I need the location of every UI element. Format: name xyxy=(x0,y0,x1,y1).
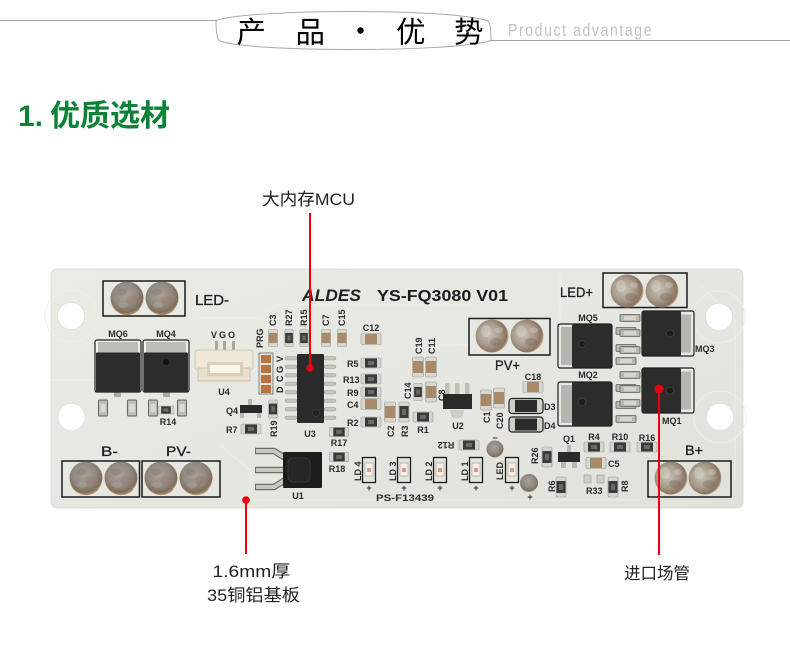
connector U4 xyxy=(195,330,253,397)
MOSFET MQ4: MQ4 xyxy=(156,329,176,339)
solder terminals xyxy=(62,273,731,497)
passive components: C14 xyxy=(403,382,413,399)
passive components: R3 xyxy=(400,425,410,437)
substrate label xyxy=(207,562,300,605)
terminal labels: PV+ xyxy=(495,357,520,373)
passive components: C11 xyxy=(427,338,437,354)
passive components: R12 xyxy=(438,440,454,450)
diodes D3 D4: D3 xyxy=(544,402,556,412)
terminal labels: B- xyxy=(101,443,118,459)
passive components: C8 xyxy=(437,389,447,401)
callout: substrate xyxy=(207,496,300,605)
header title: 品 xyxy=(296,16,325,50)
PRG pads: C xyxy=(275,375,285,382)
passive components: C20 xyxy=(495,412,505,429)
substrate label: 1.6mm厚 xyxy=(212,562,290,581)
MOSFET MQ5 xyxy=(558,313,636,368)
LED indicators: LD 2 xyxy=(424,461,434,481)
MCU label: 大内存MCU xyxy=(262,190,355,209)
regulator U2: U2 xyxy=(452,421,464,431)
passive components: R16 xyxy=(639,433,655,443)
PRG pads: D xyxy=(275,386,285,393)
sensor U1: U1 xyxy=(292,491,304,501)
passive components: R33 xyxy=(586,486,603,496)
passive components: R18 xyxy=(329,464,345,474)
MOSFET MQ3 xyxy=(620,311,715,356)
IC U3 with pins xyxy=(285,354,336,439)
terminal B+ xyxy=(648,461,731,497)
terminal labels: B+ xyxy=(685,442,703,458)
sensor U1 xyxy=(255,451,322,501)
passive components: R27 xyxy=(284,309,294,326)
LED indicators: + xyxy=(437,483,443,493)
LED indicators: + xyxy=(366,483,372,493)
section heading: 优质选材 xyxy=(50,100,170,133)
part number: PS-F13439 xyxy=(376,493,434,503)
passive components: C15 xyxy=(337,309,347,326)
callout: MOSFET xyxy=(624,384,690,583)
header title xyxy=(236,16,484,50)
LED indicators: + xyxy=(473,483,479,493)
connector U4: U4 xyxy=(218,387,230,397)
LED indicators: + xyxy=(527,492,533,502)
MOSFET MQ6: MQ6 xyxy=(108,329,128,339)
MOSFET MQ3: MQ3 xyxy=(695,344,715,354)
mounting holes xyxy=(58,302,734,430)
R14: R14 xyxy=(160,417,176,427)
passive components: R19 xyxy=(269,420,279,437)
passive components: R13 xyxy=(343,375,360,385)
R14 xyxy=(158,406,176,427)
callout: MCU xyxy=(262,190,355,372)
MOSFET MQ1: MQ1 xyxy=(662,416,682,426)
transistor Q1 xyxy=(558,434,580,468)
passive components: R17 xyxy=(331,438,347,448)
passive components xyxy=(268,309,657,497)
header pill outline xyxy=(216,12,491,50)
MOSFET MQ2 xyxy=(558,370,636,426)
board substrate xyxy=(51,269,743,508)
terminal LED- xyxy=(103,281,185,316)
Q4 and R7 xyxy=(226,399,262,435)
terminal B- xyxy=(62,461,140,497)
passive components: R10 xyxy=(612,432,628,442)
MOSFET MQ4 xyxy=(143,329,189,416)
logo: ALDES xyxy=(301,286,362,305)
header banner xyxy=(0,12,790,50)
passive components: C3 xyxy=(268,314,278,326)
LED indicators: + xyxy=(509,483,515,493)
passive components: R15 xyxy=(299,309,309,326)
passive components: R6 xyxy=(547,480,557,492)
passive components: C7 xyxy=(321,314,331,326)
IC U3 with pins: U3 xyxy=(304,429,316,439)
MOSFET label: 进口场管 xyxy=(624,564,690,583)
terminal PV- xyxy=(142,461,220,497)
passive components: C19 xyxy=(414,337,424,354)
LED indicators: LD 4 xyxy=(353,461,363,481)
diodes D3 D4: D4 xyxy=(544,421,556,431)
board model: YS-FQ3080 V01 xyxy=(377,288,508,305)
LED indicators: + xyxy=(401,483,407,493)
PRG pads: G xyxy=(275,366,285,373)
terminal labels: LED- xyxy=(195,292,229,309)
header title: 优 xyxy=(396,16,426,50)
MOSFET MQ2: MQ2 xyxy=(578,370,598,380)
passive components: R5 xyxy=(347,359,359,369)
header title: 产 xyxy=(236,16,266,50)
passive components: R26 xyxy=(530,447,540,464)
PCB board xyxy=(45,269,746,508)
terminal labels: LED+ xyxy=(560,284,593,300)
passive components: C18 xyxy=(525,372,541,382)
MOSFET MQ6 xyxy=(95,329,141,416)
passive components: R2 xyxy=(347,418,359,428)
terminal labels xyxy=(101,284,703,459)
PRG pads xyxy=(255,328,285,394)
passive components: R1 xyxy=(417,425,429,435)
passive components: C12 xyxy=(363,323,379,333)
MOSFET MQ1 xyxy=(620,368,694,426)
LED indicators: LED xyxy=(495,461,505,480)
LED indicators: − xyxy=(492,433,498,443)
MOSFET MQ5: MQ5 xyxy=(578,313,598,323)
passive components: R4 xyxy=(588,432,600,442)
substrate label: 35铜铝基板 xyxy=(207,586,300,605)
header title: 势 xyxy=(454,16,484,50)
passive components: C2 xyxy=(386,425,396,437)
regulator U2 xyxy=(443,383,472,431)
passive components: C4 xyxy=(347,400,359,410)
diodes D3 D4 xyxy=(509,398,556,432)
transistor Q1: Q1 xyxy=(563,434,575,444)
terminal labels: PV- xyxy=(166,443,191,459)
terminal LED+ xyxy=(603,273,687,308)
LED indicators: LD 3 xyxy=(388,461,398,481)
passive components: R8 xyxy=(620,480,630,492)
header subtitle: Product advantage xyxy=(508,20,652,40)
passive components: C1 xyxy=(482,411,492,423)
PRG pads: V xyxy=(275,356,285,362)
section heading: 1. xyxy=(18,100,43,133)
Q4 and R7: Q4 xyxy=(226,406,238,416)
terminal PV+ xyxy=(469,318,550,355)
passive components: R9 xyxy=(347,388,359,398)
connector U4: VGO xyxy=(211,330,237,340)
PRG pads: PRG xyxy=(255,328,265,348)
LED indicators xyxy=(353,433,538,502)
LED indicators: LD 1 xyxy=(460,461,470,481)
Q4 and R7: R7 xyxy=(226,425,238,435)
passive components: C5 xyxy=(608,459,620,469)
